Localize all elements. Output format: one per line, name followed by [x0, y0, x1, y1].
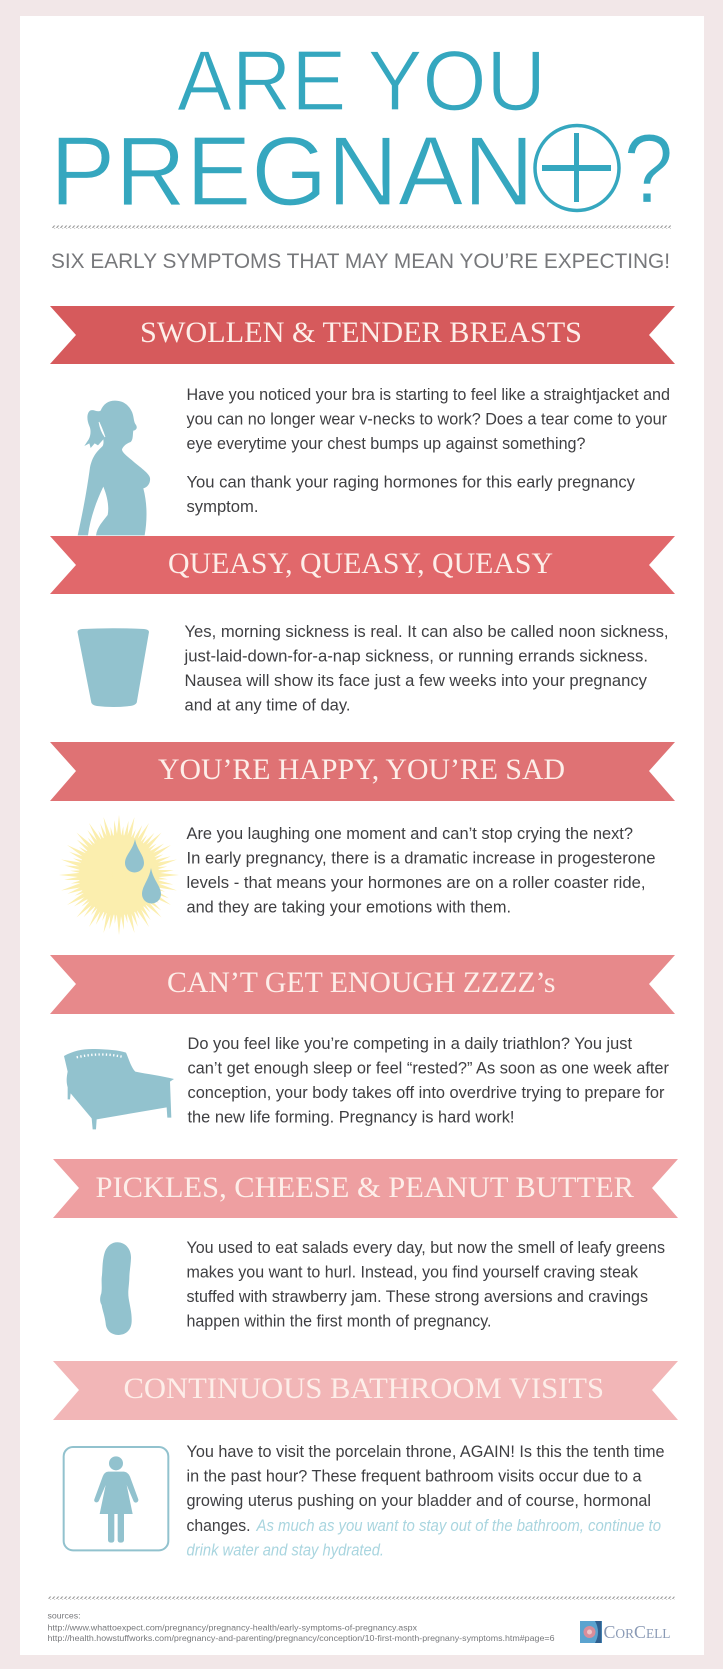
banner heading — [50, 536, 675, 594]
body text: symptom. — [186, 498, 258, 516]
sources: http://health.howstuffworks.com/pregnancy-and-parenting/pregnancy/conception/10-first-month-pregnany-symptoms.htm#page=6 — [48, 1633, 555, 1643]
body text: levels - that means your hormones are on a roller coaster ride, — [186, 874, 646, 892]
banner heading: PICKLES, CHEESE & PEANUT BUTTER — [96, 1172, 634, 1204]
body text: You can thank your raging hormones for this early pregnancy — [186, 474, 636, 492]
icon: sun with tear drops — [57, 813, 181, 937]
banner heading: YOU’RE HAPPY, YOU’RE SAD — [158, 754, 565, 786]
title divider — [52, 226, 671, 228]
panel: zzzz — [50, 955, 675, 1129]
icon: pregnant woman silhouette — [78, 401, 150, 535]
body text: and they are taking your emotions with them. — [186, 898, 511, 916]
logo: CorCell — [580, 1621, 670, 1643]
body text: happen within the first month of pregnancy. — [186, 1312, 492, 1330]
panel: happy and sad — [50, 742, 675, 937]
body text: growing uterus pushing on your bladder and of course, hormonal — [186, 1492, 651, 1510]
title — [50, 34, 674, 226]
title: ARE YOU — [177, 34, 546, 129]
icon: pickle — [100, 1242, 132, 1335]
banner heading: SWOLLEN & TENDER BREASTS — [140, 317, 582, 349]
body text: You used to eat salads every day, but now the smell of leafy greens — [186, 1239, 665, 1257]
banner heading: CAN’T GET ENOUGH ZZZZ’s — [167, 967, 556, 999]
body text: eye everytime your chest bumps up against something? — [186, 435, 586, 453]
body text: Are you laughing one moment and can’t stop crying the next? — [186, 825, 633, 843]
body text — [186, 825, 656, 916]
banner heading: QUEASY, QUEASY, QUEASY — [168, 548, 553, 580]
logo: CorCell: CORCELL — [604, 1622, 670, 1642]
subtitle: SIX EARLY SYMPTOMS THAT MAY MEAN YOU’RE EXPECTING! — [51, 249, 670, 273]
callout: stay hydrated — [186, 1517, 661, 1560]
panel: swollen and tender breasts — [50, 306, 675, 535]
body text: in the past hour? These frequent bathroom visits occur due to a — [186, 1468, 642, 1486]
body text — [186, 1443, 664, 1535]
icon: ponytail highlight — [99, 422, 105, 437]
panel: pickles, cheese and peanut butter — [53, 1159, 678, 1335]
body text: makes you want to hurl. Instead, you find yourself craving steak — [186, 1264, 639, 1282]
body text: stuffed with strawberry jam. These strong aversions and cravings — [186, 1288, 648, 1306]
body text: Do you feel like you’re competing in a daily triathlon? You just — [188, 1035, 632, 1053]
banner heading — [50, 306, 675, 364]
body text: just-laid-down-for-a-nap sickness, or running errands sickness. — [183, 648, 648, 666]
sources: http://www.whattoexpect.com/pregnancy/pregnancy-health/early-symptoms-of-pregnancy.aspx — [48, 1622, 418, 1632]
panel: continuous bathroom visits — [53, 1361, 678, 1560]
body text: can’t get enough sleep or feel “rested?” As soon as one week after — [188, 1060, 670, 1078]
body text — [186, 386, 670, 516]
sources: sources: — [48, 1610, 80, 1620]
body text: changes. — [186, 1517, 250, 1535]
body text: conception, your body takes off into overdrive trying to prepare for — [188, 1084, 665, 1102]
body text: Nausea will show its face just a few weeks into your pregnancy — [184, 672, 648, 690]
body text: and at any time of day. — [184, 696, 350, 714]
panel: queasy — [50, 536, 675, 714]
title: ? — [624, 114, 674, 224]
banner heading — [50, 955, 675, 1014]
body text — [183, 623, 669, 714]
body text — [188, 1035, 670, 1126]
title: PREGNAN — [50, 116, 534, 226]
body text: Have you noticed your bra is starting to feel like a straightjacket and — [186, 386, 670, 404]
icon: restroom sign — [64, 1447, 168, 1550]
callout: stay hydrated: drink water and stay hydrated. — [186, 1542, 384, 1560]
body text: You have to visit the porcelain throne, AGAIN! Is this the tenth time — [186, 1443, 664, 1461]
icon: bed — [64, 1049, 174, 1129]
banner heading: CONTINUOUS BATHROOM VISITS — [124, 1373, 604, 1405]
body text: In early pregnancy, there is a dramatic increase in progesterone — [186, 850, 656, 868]
body text: the new life forming. Pregnancy is hard work! — [188, 1108, 514, 1126]
banner heading — [53, 1361, 678, 1420]
body text: Yes, morning sickness is real. It can also be called noon sickness, — [184, 623, 668, 641]
callout: stay hydrated: As much as you want to stay out of the bathroom, continue to — [256, 1517, 661, 1535]
icon: plus in circle — [535, 126, 619, 210]
body text: you can no longer wear v-necks to work? Does a tear come to your — [186, 410, 668, 428]
banner heading — [50, 742, 675, 801]
sources — [48, 1610, 555, 1643]
footer divider — [48, 1596, 674, 1600]
banner heading — [53, 1159, 678, 1218]
body text — [186, 1239, 665, 1330]
icon: cup — [78, 628, 149, 707]
